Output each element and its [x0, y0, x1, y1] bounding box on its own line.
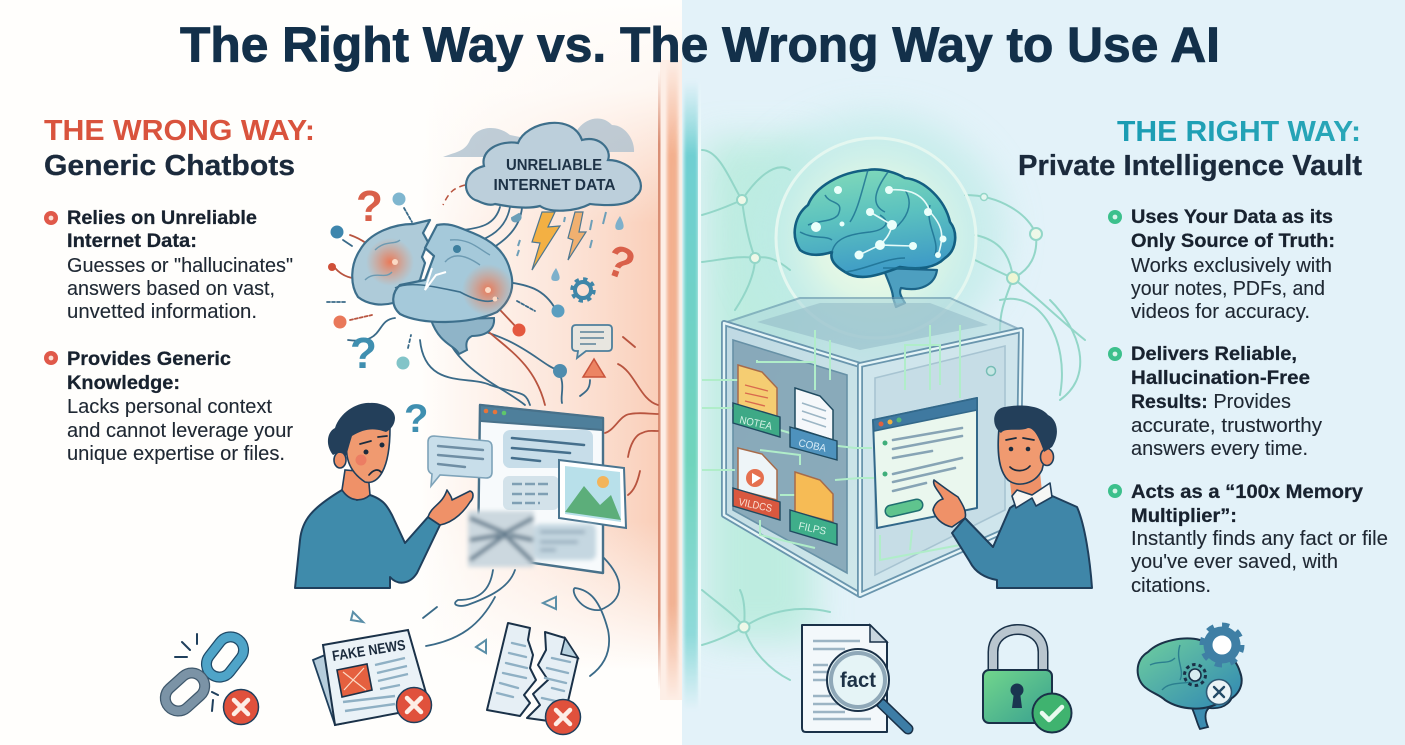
heading: wrong way — [44, 115, 315, 182]
illustration: confused person — [295, 403, 473, 588]
neck — [342, 470, 370, 500]
icon: fake news newspaper: FAKE NEWS — [331, 638, 407, 665]
cube left face — [724, 323, 860, 595]
text block: uses your data: Only Source of Truth: — [1131, 230, 1335, 252]
text block: relies on unreliable internet data: Relies on Unreliable — [67, 207, 257, 229]
illustration: broken brain and tangled wires — [327, 182, 658, 441]
heading: right way — [1018, 116, 1363, 182]
chat bubble — [428, 436, 492, 486]
illustration: chat window — [351, 405, 658, 676]
icon: question marks: ? — [356, 182, 383, 231]
file: coba: COBA — [797, 437, 827, 455]
text block: uses your data: videos for accuracy. — [1131, 301, 1310, 323]
illustration: data vault cube — [702, 298, 1021, 595]
text block: memory multiplier: citations. — [1131, 575, 1211, 597]
sweater — [295, 490, 440, 588]
panel: right way background — [682, 0, 1405, 745]
pointing hand — [933, 480, 966, 527]
icon: fake news newspaper — [313, 630, 432, 725]
icon: glowing brain — [776, 138, 976, 338]
text block: memory multiplier: Multiplier”: — [1131, 505, 1237, 527]
title: The Right Way vs. The Wrong Way to Use AI — [180, 18, 1220, 72]
file: notea: NOTEA — [738, 414, 773, 433]
text block: provides generic knowledge: Knowledge: — [67, 372, 180, 394]
sweater — [952, 495, 1092, 588]
icon: broken brain — [352, 220, 514, 354]
text block: relies on unreliable internet data: Internet Data: — [67, 230, 197, 252]
text block: provides generic knowledge: Provides Generic — [67, 348, 231, 370]
panel: wrong way background — [0, 0, 682, 745]
background: neural network lines — [702, 150, 1085, 680]
heading: wrong way: Generic Chatbots — [44, 150, 295, 182]
ear — [334, 452, 346, 468]
right panel outline — [875, 346, 1005, 575]
icon: storm cloud with lightning — [443, 118, 641, 281]
text block: delivers reliable results: accurate, trustworthy — [1131, 415, 1322, 437]
hair — [328, 403, 395, 456]
glowing screen — [873, 398, 977, 528]
text block: delivers reliable results: answers every time. — [1131, 438, 1308, 460]
text block: relies on unreliable internet data: Guesses or "hallucinates" — [67, 255, 293, 277]
icon: message bubble and arrow — [572, 325, 658, 405]
illustration: confident person — [933, 406, 1092, 588]
text block: delivers reliable results: Hallucination-Free — [1131, 367, 1310, 389]
collar — [1012, 483, 1052, 508]
neck — [1010, 472, 1042, 500]
icon: brain with gears — [1138, 626, 1242, 729]
text block: memory multiplier: Instantly finds any fact or file — [1131, 528, 1388, 550]
image card — [559, 460, 626, 528]
file: folder — [790, 472, 837, 545]
face — [998, 415, 1052, 484]
icon: question marks: ? — [350, 329, 377, 378]
face — [346, 422, 390, 482]
heading: right way: THE RIGHT WAY: — [1117, 116, 1361, 148]
text block: memory multiplier — [1108, 481, 1388, 597]
heading: wrong way: THE WRONG WAY: — [44, 115, 315, 147]
file: video: VILDCS — [737, 496, 773, 515]
icon: scattered nodes — [327, 192, 567, 378]
text block: uses your data: your notes, PDFs, and — [1131, 278, 1325, 300]
text block: delivers reliable results: Delivers Reliable, — [1131, 343, 1297, 365]
icon: gear — [572, 279, 594, 301]
text block: uses your data: Works exclusively with — [1131, 255, 1332, 277]
file: video — [733, 448, 780, 520]
icon: storm cloud with lightning: INTERNET DATA — [494, 177, 616, 194]
hand — [428, 490, 473, 525]
icon: question marks — [350, 182, 641, 441]
glitched patch — [468, 511, 596, 567]
icon: fact document with magnifier — [802, 625, 908, 732]
file: notea — [733, 365, 780, 437]
text block: provides generic knowledge — [44, 348, 293, 465]
icon: torn document — [487, 623, 580, 734]
text block: relies on unreliable internet data — [44, 207, 293, 323]
icon: storm cloud with lightning: UNRELIABLE — [506, 157, 602, 174]
text block: memory multiplier: Acts as a “100x Memory — [1131, 481, 1363, 503]
text block: relies on unreliable internet data: unvetted information. — [67, 301, 257, 323]
icon: broken chain link — [160, 632, 258, 724]
text block: provides generic knowledge: unique expertise or files. — [67, 443, 285, 465]
text block: uses your data — [1108, 206, 1335, 323]
text block: relies on unreliable internet data: answers based on vast, — [67, 278, 275, 300]
text block: uses your data: Uses Your Data as its — [1131, 206, 1333, 228]
icon: fact document with magnifier: fact — [840, 669, 876, 692]
falling wires — [351, 413, 658, 676]
circuit lines — [702, 325, 960, 560]
text block: delivers reliable results: Results: Provides — [1131, 391, 1291, 413]
icon: question marks: ? — [599, 235, 641, 290]
text block: memory multiplier: you've ever saved, with — [1131, 551, 1338, 573]
text block: delivers reliable results — [1108, 343, 1322, 460]
icon: question marks: ? — [404, 397, 428, 441]
text block: provides generic knowledge: Lacks personal context — [67, 396, 272, 418]
heading: right way: Private Intelligence Vault — [1018, 150, 1363, 182]
cube right face — [860, 330, 1021, 595]
file: coba — [790, 388, 837, 460]
left recessed panel — [733, 340, 847, 573]
hair — [994, 406, 1057, 452]
file: folder: FILPS — [797, 520, 827, 538]
text block: provides generic knowledge: and cannot leverage your — [67, 420, 293, 442]
icon: padlock with check — [983, 630, 1072, 732]
cube top face — [724, 298, 1021, 365]
